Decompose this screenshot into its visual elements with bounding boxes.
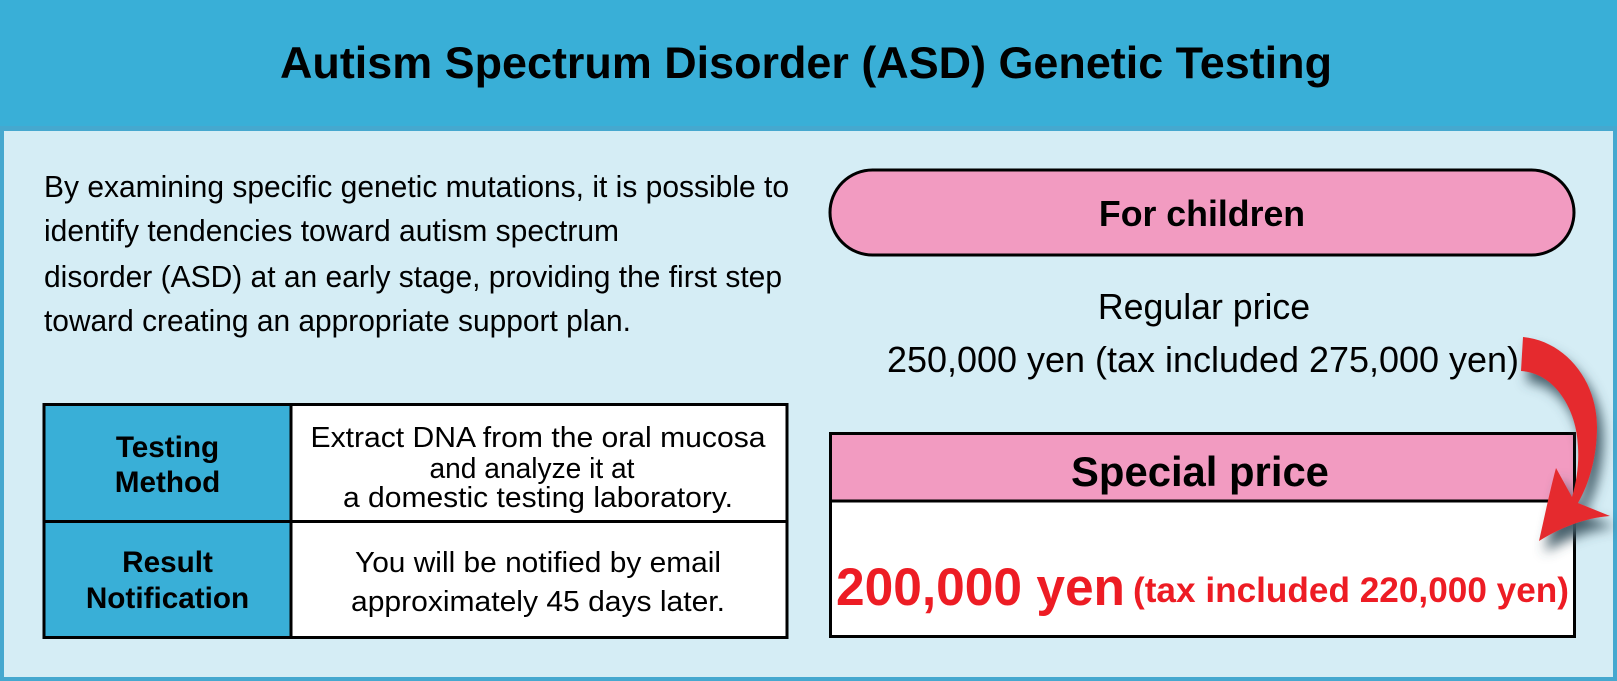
panel: special price — [830, 434, 1575, 636]
panel: special price: Special price — [1071, 448, 1329, 495]
row text: result notification: approximately 45 days later. — [351, 586, 725, 618]
text block: description: By examining specific genetic mutations, it is possible to — [44, 169, 789, 204]
text block: regular price — [887, 287, 1519, 380]
tax included amount: (tax included 220,000 yen) — [1133, 571, 1569, 610]
row label: result notification: Notification — [86, 582, 249, 615]
arrow: regular to special price — [1521, 337, 1610, 541]
row label: result notification: Result — [122, 546, 213, 579]
text block: regular price: Regular price — [1098, 287, 1310, 327]
row label: testing method: Testing — [116, 431, 219, 464]
row text: testing method: and analyze it at — [430, 453, 634, 485]
row text: result notification — [351, 547, 725, 618]
row text: testing method: a domestic testing laboratory. — [343, 482, 733, 514]
text block: description: identify tendencies toward autism spectrum — [44, 213, 619, 248]
row text: testing method: Extract DNA from the oral mucosa — [310, 422, 766, 454]
table: testing details — [44, 404, 788, 638]
text block: description: disorder (ASD) at an early stage, providing the first step — [44, 259, 782, 294]
title: Autism Spectrum Disorder (ASD) Genetic Testing — [280, 39, 1332, 88]
pill: for children — [830, 170, 1574, 255]
text block: description: toward creating an appropriate support plan. — [44, 303, 631, 338]
text block: regular price: 250,000 yen (tax included 275,000 yen) — [887, 340, 1519, 380]
row label: testing method: Method — [115, 466, 220, 499]
row text: testing method — [310, 422, 766, 514]
text block: description — [44, 169, 789, 338]
row label: testing method — [115, 431, 220, 499]
pill: for children: For children — [1099, 194, 1305, 234]
row label: result notification — [86, 546, 249, 615]
header band — [0, 0, 1617, 131]
special price amount: 200,000 yen — [836, 558, 1125, 617]
row text: result notification: You will be notified by email — [355, 547, 721, 579]
